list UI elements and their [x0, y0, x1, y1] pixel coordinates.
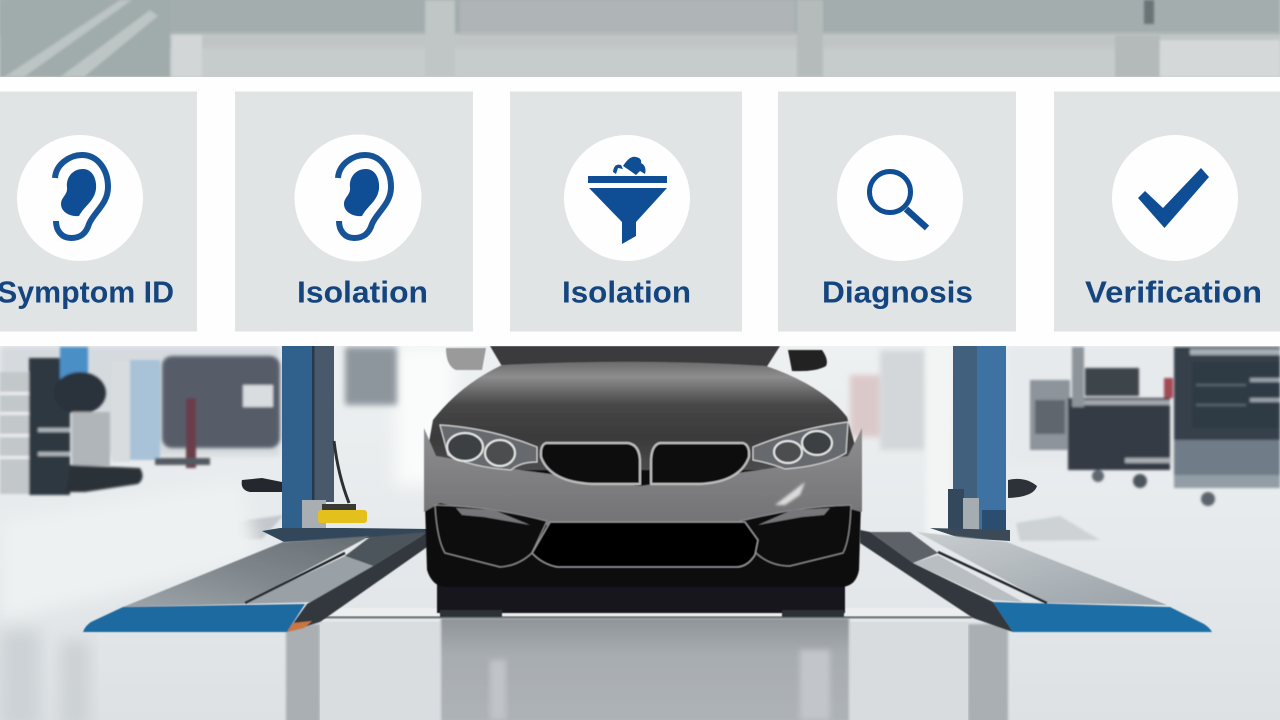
car lower body and tyres	[424, 470, 862, 587]
light plate section	[913, 555, 1023, 602]
centre bumper intake	[532, 522, 758, 567]
slot	[938, 552, 1047, 603]
white band behind step cards	[0, 77, 1280, 346]
card: Verification	[1054, 92, 1280, 332]
icon circle	[837, 135, 963, 261]
orange corner	[287, 621, 312, 632]
left kidney grille	[541, 443, 640, 484]
blue ramp edge	[83, 604, 305, 632]
icon circle	[1112, 135, 1238, 261]
card: Diagnosis	[778, 92, 1016, 332]
background: workshop floor and walls	[0, 346, 1280, 720]
car	[424, 346, 862, 617]
label: Verification	[1085, 274, 1262, 310]
left bumper intake	[435, 505, 547, 567]
icon: check mark	[1138, 168, 1209, 228]
icon: funnel	[588, 157, 667, 244]
dark plate section	[345, 532, 428, 566]
card: Isolation (ear)	[235, 92, 473, 332]
car hood	[424, 362, 862, 470]
card: Symptom ID	[0, 92, 197, 332]
right lift column	[930, 346, 1037, 541]
right mirror	[788, 350, 827, 371]
left headlight	[440, 425, 537, 470]
textured plate	[123, 536, 370, 607]
label: Isolation	[562, 274, 691, 310]
left tyre contact patch	[440, 610, 502, 617]
slot	[245, 553, 345, 603]
dark side rail	[287, 532, 430, 632]
car shadow	[437, 570, 845, 613]
textured plate	[917, 532, 1167, 605]
icon circle	[17, 135, 143, 261]
left mirror	[446, 348, 486, 370]
left vane	[456, 508, 530, 525]
card: Isolation (funnel)	[510, 92, 742, 332]
label: Diagnosis	[822, 274, 973, 310]
icon: ear	[55, 155, 108, 238]
right lift ramp	[860, 530, 1212, 632]
background: workshop ceiling	[0, 0, 1280, 80]
right bumper intake	[740, 505, 851, 566]
background: left tool cabinets and parked car	[0, 347, 397, 495]
floor reflection of car and lift	[0, 608, 1008, 720]
icon circle	[294, 134, 422, 262]
light plate section	[243, 556, 373, 604]
label: Isolation	[297, 274, 428, 310]
icon circle	[564, 135, 690, 261]
right headlight	[753, 422, 848, 469]
car front bumper	[424, 428, 862, 525]
background: right tool carts and cabinet	[1030, 347, 1280, 506]
left lift ramp	[83, 532, 430, 632]
right vane	[758, 508, 830, 525]
right tyre contact patch	[782, 610, 844, 617]
car windshield	[490, 346, 780, 368]
icon: magnifying glass	[870, 172, 927, 228]
bumper highlight	[775, 482, 805, 505]
blue ramp edge	[993, 602, 1212, 632]
label: Symptom ID	[0, 274, 174, 310]
left lift column	[242, 346, 430, 542]
icon: ear	[338, 155, 391, 238]
dark plate section	[870, 532, 938, 563]
dark side rail	[860, 530, 1013, 632]
right kidney grille	[651, 443, 749, 484]
